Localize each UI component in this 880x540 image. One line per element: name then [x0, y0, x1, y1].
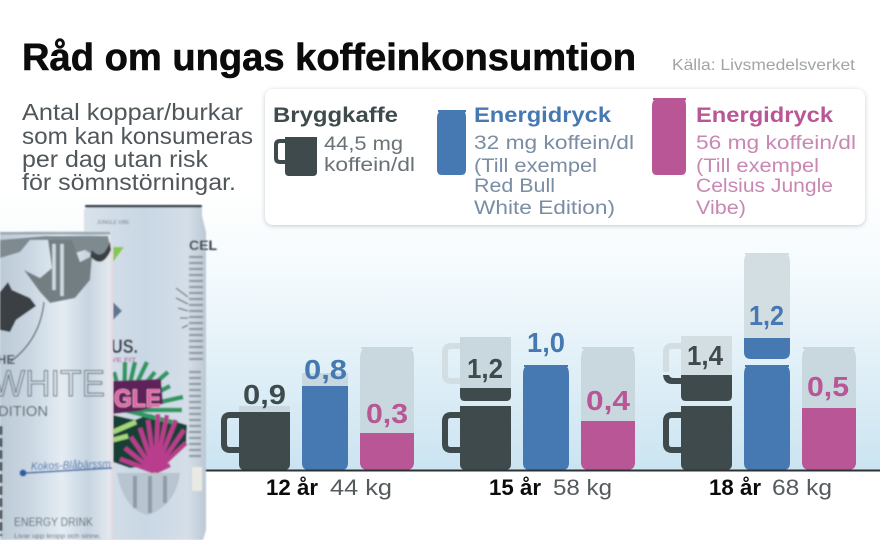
photo: Red Bull White Edition can	[0, 231, 113, 540]
chart: 18 years	[663, 253, 856, 500]
pink can 0,3	[360, 347, 414, 470]
label: 18 years	[709, 475, 832, 500]
mugs 1,2	[445, 337, 511, 470]
flavour line	[20, 458, 112, 476]
photo: Celsius can: US.	[111, 337, 138, 358]
label: 18 years: 18 år	[709, 475, 761, 500]
legend: pink energy drink: 56 mg koffein/dl	[696, 133, 856, 154]
legend: pink energy drink: Energidryck	[696, 104, 833, 127]
legend: brewed coffee: Bryggkaffe	[273, 104, 398, 127]
photo: Celsius can	[84, 205, 217, 540]
pink can 0,5: 0,5	[807, 371, 849, 402]
mugs 1,2: 1,2	[467, 353, 503, 384]
background gradient	[0, 190, 880, 470]
source: Källa: Livsmedelsverket	[672, 57, 856, 74]
legend: pink energy drink: (Till exempel	[696, 156, 819, 177]
pink can 0,3: 0,3	[366, 398, 408, 429]
legend: blue energy drink: White Edition)	[474, 198, 615, 219]
intro text: för sömnstörningar.	[22, 169, 236, 195]
bull artwork	[0, 236, 111, 362]
label: 15 years	[489, 475, 612, 500]
intro text: som kan konsumeras	[22, 123, 253, 149]
nutrition text column	[189, 257, 203, 456]
blue can 0,8	[302, 354, 348, 470]
legend: pink energy drink	[652, 98, 856, 219]
mugs 1,4: 1,4	[687, 340, 723, 371]
chart: 15 years	[445, 327, 635, 500]
label: 15 years: 15 år	[489, 475, 541, 500]
label: 15 years: 58 kg	[553, 475, 612, 500]
legend: blue energy drink: (Till exempel	[474, 156, 597, 177]
legend: brewed coffee: 44,5 mg	[324, 134, 403, 155]
photo: Red Bull White Edition can: Livar upp kropp och sinne.	[14, 533, 101, 540]
blue cans 1,2	[744, 253, 790, 470]
mug 0,9	[224, 379, 290, 470]
legend background	[265, 89, 865, 225]
chart: 12 years	[224, 347, 414, 500]
legend: pink energy drink: Vibe)	[696, 198, 746, 219]
mugs 1,4	[663, 336, 732, 470]
blue can 1,0	[523, 327, 569, 470]
photo: Celsius can: CEL	[189, 237, 217, 253]
jungle artwork	[113, 362, 187, 472]
tropical leaf beside text	[176, 288, 188, 328]
label: 12 years: 44 kg	[330, 475, 392, 500]
label: 18 years: 68 kg	[772, 475, 832, 500]
intro text: per dag utan risk	[22, 146, 209, 172]
pink can 0,5	[802, 347, 856, 470]
legend: blue energy drink: 32 mg koffein/dl	[474, 133, 634, 154]
chart baseline	[200, 470, 880, 472]
title: Råd om ungas koffeinkonsumtion	[22, 37, 636, 79]
intro text	[22, 99, 253, 195]
label: 12 years: 12 år	[266, 475, 318, 500]
blue cans 1,2: 1,2	[749, 300, 784, 331]
panel: legend	[265, 89, 865, 225]
legend: pink energy drink: Celsius Jungle	[696, 176, 833, 197]
legend: blue energy drink	[437, 104, 634, 219]
label: 12 years	[266, 475, 392, 500]
photo: Celsius can: JUNGLE VIBE	[97, 220, 130, 226]
blue can 0,8: 0,8	[304, 354, 347, 385]
legend: brewed coffee: koffein/dl	[324, 155, 415, 176]
photo: Celsius can: VE FIT	[111, 357, 136, 364]
jungle artwork: GLE	[114, 385, 161, 413]
intro text: Antal koppar/burkar	[22, 99, 243, 125]
photo: Red Bull White Edition can: ENERGY DRINK	[14, 517, 93, 529]
pink can 0,4: 0,4	[586, 385, 630, 416]
legend: brewed coffee	[273, 104, 415, 176]
mug 0,9: 0,9	[243, 379, 286, 410]
legend: blue energy drink: Energidryck	[474, 104, 611, 127]
legend: blue energy drink: Red Bull	[474, 176, 555, 197]
pink can 0,4	[581, 347, 635, 470]
blue can 1,0: 1,0	[527, 327, 565, 358]
flavour line: Kokos-Blåbärssm	[31, 458, 111, 473]
